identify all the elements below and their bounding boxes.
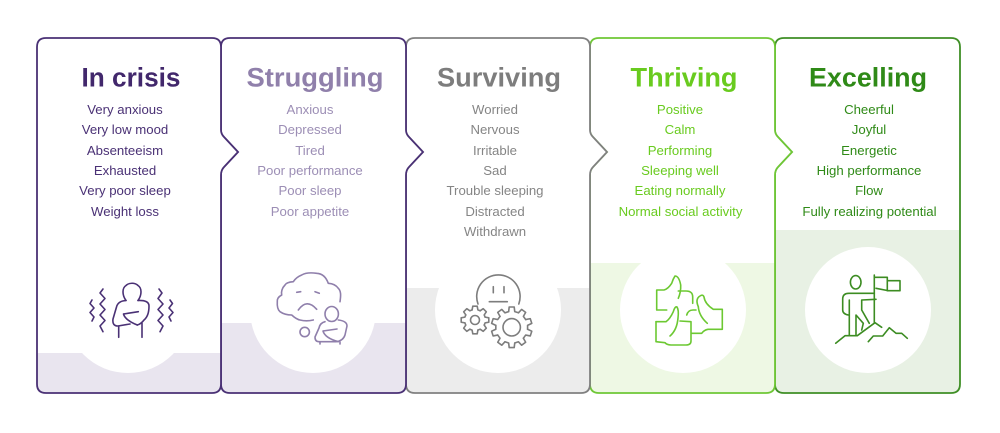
heading: Thriving: Thriving [630, 62, 738, 92]
panel: Struggling [221, 38, 423, 393]
text block: Excelling states: High performance [817, 163, 921, 178]
panel: Excelling [775, 38, 960, 393]
icon: person with flag on mountain [836, 275, 907, 343]
heading: Surviving: Surviving [437, 62, 561, 92]
icon: neutral face with gears [461, 275, 533, 348]
icon: sad thought cloud with person [277, 273, 347, 344]
text block: In crisis states: Absenteeism [87, 143, 163, 158]
heading: Struggling: Struggling [246, 62, 384, 92]
text block: Struggling states: Poor appetite [271, 204, 349, 219]
text block: Thriving states [619, 102, 743, 219]
text block: Excelling states: Joyful [852, 122, 886, 137]
text block: Excelling states: Cheerful [844, 102, 894, 117]
text block: Excelling states: Flow [855, 183, 883, 198]
text block: Surviving states: Nervous [470, 122, 520, 137]
icon: shivering person with crossed arms [90, 283, 173, 337]
text block: Struggling states: Poor sleep [278, 183, 342, 198]
text block: Surviving states: Distracted [465, 204, 525, 219]
text block: Struggling states: Anxious [287, 102, 334, 117]
text block: Struggling states: Poor performance [257, 163, 363, 178]
text block: Surviving states: Sad [483, 163, 507, 178]
panel: Thriving [590, 38, 792, 393]
text block: In crisis states: Very anxious [87, 102, 163, 117]
heading: In crisis: In crisis [82, 62, 180, 92]
text block: Struggling states: Depressed [278, 122, 342, 137]
text block: Surviving states: Withdrawn [464, 224, 526, 239]
panel: In crisis [37, 38, 238, 393]
text block: Thriving states: Sleeping well [641, 163, 719, 178]
text block: In crisis states [79, 102, 171, 219]
text block: Surviving states: Trouble sleeping [446, 183, 544, 198]
text block: Surviving states [446, 102, 544, 239]
text block: In crisis states: Weight loss [91, 204, 159, 219]
text block: In crisis states: Very poor sleep [79, 183, 171, 198]
text block: Thriving states: Eating normally [635, 183, 726, 198]
text block: Excelling states: Energetic [841, 143, 897, 158]
text block: Thriving states: Performing [648, 143, 712, 158]
text block: In crisis states: Exhausted [94, 163, 156, 178]
text block: Thriving states: Positive [657, 102, 703, 117]
panel: Surviving [406, 38, 607, 393]
text block: Surviving states: Irritable [473, 143, 517, 158]
text block: Struggling states: Tired [295, 143, 325, 158]
text block: Surviving states: Worried [472, 102, 518, 117]
text block: Excelling states [802, 102, 937, 219]
text block: In crisis states: Very low mood [82, 122, 168, 137]
text block: Struggling states [257, 102, 363, 219]
text block: Thriving states: Normal social activity [619, 204, 743, 219]
text block: Thriving states: Calm [665, 122, 695, 137]
text block: Excelling states: Fully realizing potential [802, 204, 937, 219]
heading: Excelling: Excelling [809, 62, 927, 92]
icon: three thumbs up [656, 276, 722, 345]
